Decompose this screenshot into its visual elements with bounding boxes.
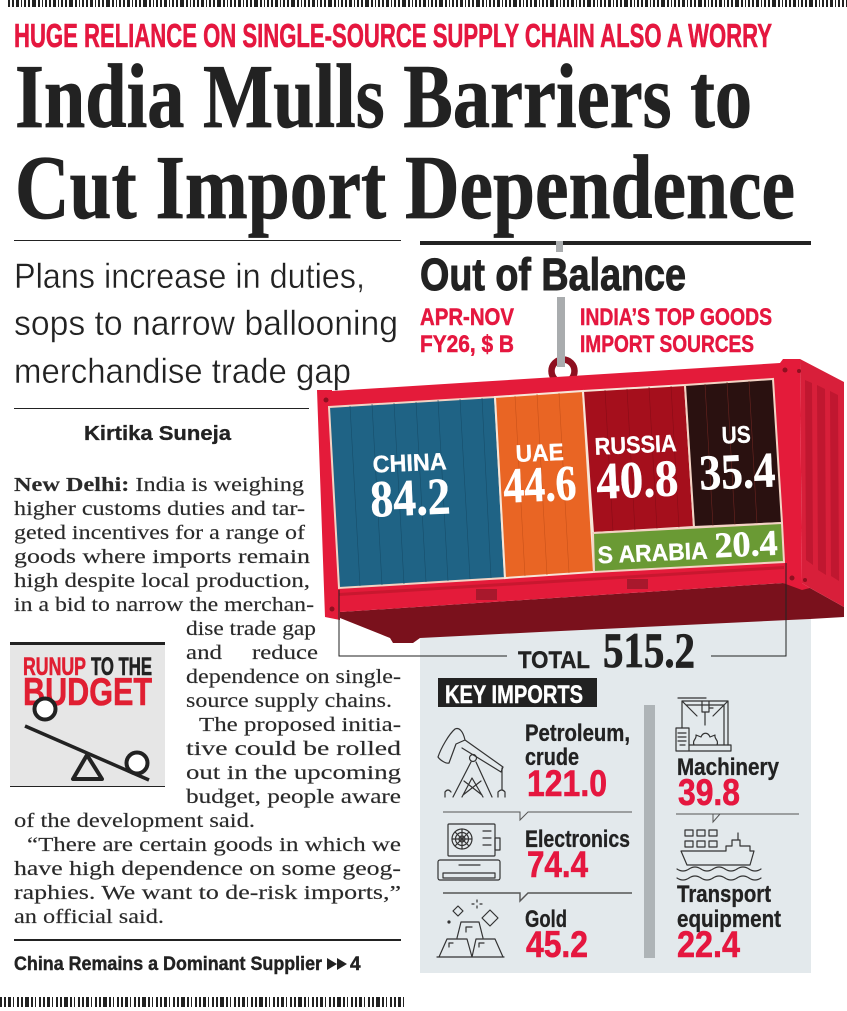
chart subtitle: period: FY26, $ B	[420, 331, 514, 358]
article text: in a bid to narrow the merchan-	[14, 594, 314, 616]
chart subtitle: description	[580, 304, 772, 358]
chart subtitle: period: APR-NOV	[420, 304, 514, 331]
article text: New Delhi: India is weighing	[14, 474, 304, 496]
column divider	[644, 705, 655, 958]
subheading	[14, 257, 398, 391]
item: gold	[525, 906, 588, 965]
container front frame	[317, 359, 810, 620]
article text: tive could be rolled	[186, 738, 401, 760]
block: US	[685, 379, 782, 527]
article text: “There are certain goods in which we	[27, 834, 401, 856]
item: transport equipment: Transport	[677, 881, 771, 908]
block: China: CHINA	[372, 448, 447, 479]
item: petroleum	[525, 720, 630, 804]
total: 515.2	[603, 622, 695, 678]
panel: runup to the budget: TO THE	[91, 653, 152, 681]
container treemap	[317, 355, 844, 643]
panel: runup to the budget: RUNUP	[23, 653, 86, 681]
block: Russia: 40.8	[595, 450, 679, 511]
item: electronics: 74.4	[527, 844, 588, 885]
article text: dependence on single-	[186, 666, 401, 688]
article text: higher customs duties and tar-	[14, 498, 305, 520]
article text: reduce	[252, 642, 318, 664]
article text: high despite local production,	[14, 570, 310, 592]
chart subtitle: description: IMPORT SOURCES	[580, 331, 754, 358]
block: UAE: UAE	[515, 439, 564, 468]
item: electronics: Electronics	[525, 826, 630, 853]
item: transport equipment: equipment	[677, 906, 781, 933]
article text: raphies. We want to de-risk imports,”	[14, 882, 401, 904]
chart subtitle: description: INDIA’S TOP GOODS	[580, 304, 772, 331]
container underside	[340, 583, 844, 643]
block: US: US	[721, 421, 751, 450]
item: petroleum: Petroleum,	[525, 720, 630, 747]
subheading: merchandise trade gap	[14, 352, 351, 391]
icon: gold bars	[437, 900, 504, 957]
icon: oil pump	[438, 728, 505, 797]
item: gold: Gold	[525, 906, 567, 933]
block: Russia: RUSSIA	[594, 430, 677, 461]
panel: runup to the budget	[10, 642, 165, 787]
container side	[800, 359, 844, 607]
total bracket	[339, 563, 786, 656]
article text: goods where imports remain	[14, 546, 310, 568]
block: China: 84.2	[369, 468, 451, 529]
article text: budget, people aware	[186, 786, 401, 808]
item: petroleum: crude	[525, 744, 579, 771]
article text: out in the upcoming	[186, 762, 401, 784]
panel: key imports background	[420, 610, 811, 973]
item: transport equipment	[677, 881, 781, 965]
article text: dise trade gap	[186, 618, 316, 640]
block: Saudi Arabia: 20.4	[714, 523, 778, 565]
icon: cargo ship	[677, 830, 761, 880]
item: machinery: 39.8	[678, 772, 740, 813]
article text: an official said.	[14, 906, 164, 928]
article text: and	[186, 642, 222, 664]
item: transport equipment: 22.4	[677, 924, 740, 965]
article text: of the development said.	[14, 810, 255, 832]
total: TOTAL	[518, 647, 590, 674]
article text: The proposed initia-	[199, 714, 401, 736]
article text: source supply chains.	[186, 690, 392, 712]
block: UAE: 44.6	[502, 454, 577, 514]
panel: runup to the budget: BUDGET	[23, 671, 152, 714]
block: Russia	[583, 385, 694, 533]
chart subtitle: period	[420, 304, 514, 358]
story pointer: China Remains a Dominant Supplier	[14, 954, 323, 975]
block: Saudi Arabia	[593, 523, 784, 572]
byline: Kirtika Suneja	[84, 423, 232, 445]
total	[518, 622, 695, 678]
subheading: sops to narrow ballooning	[14, 304, 398, 343]
item: machinery	[677, 754, 780, 813]
article text: geted incentives for a range of	[14, 522, 305, 544]
subheading: Plans increase in duties,	[14, 257, 365, 296]
icon: air conditioner	[438, 824, 500, 880]
item: machinery: Machinery	[677, 754, 780, 781]
hook ring	[552, 355, 574, 382]
item: gold: 45.2	[526, 924, 588, 965]
block: US: 35.4	[698, 441, 776, 501]
article text: have high dependence on some geog-	[14, 858, 401, 880]
chart title: Out of Balance	[420, 249, 686, 300]
crane cable	[556, 241, 565, 369]
item: petroleum: 121.0	[527, 763, 607, 804]
block: UAE	[495, 391, 594, 578]
item: electronics	[525, 826, 630, 885]
block: Saudi Arabia: S ARABIA	[597, 538, 708, 569]
article text	[14, 474, 401, 928]
main title	[15, 46, 795, 238]
block: China	[329, 397, 505, 588]
story pointer: 4	[350, 954, 361, 975]
key imports label: KEY IMPORTS	[445, 681, 583, 709]
icon: machinery	[676, 698, 731, 751]
